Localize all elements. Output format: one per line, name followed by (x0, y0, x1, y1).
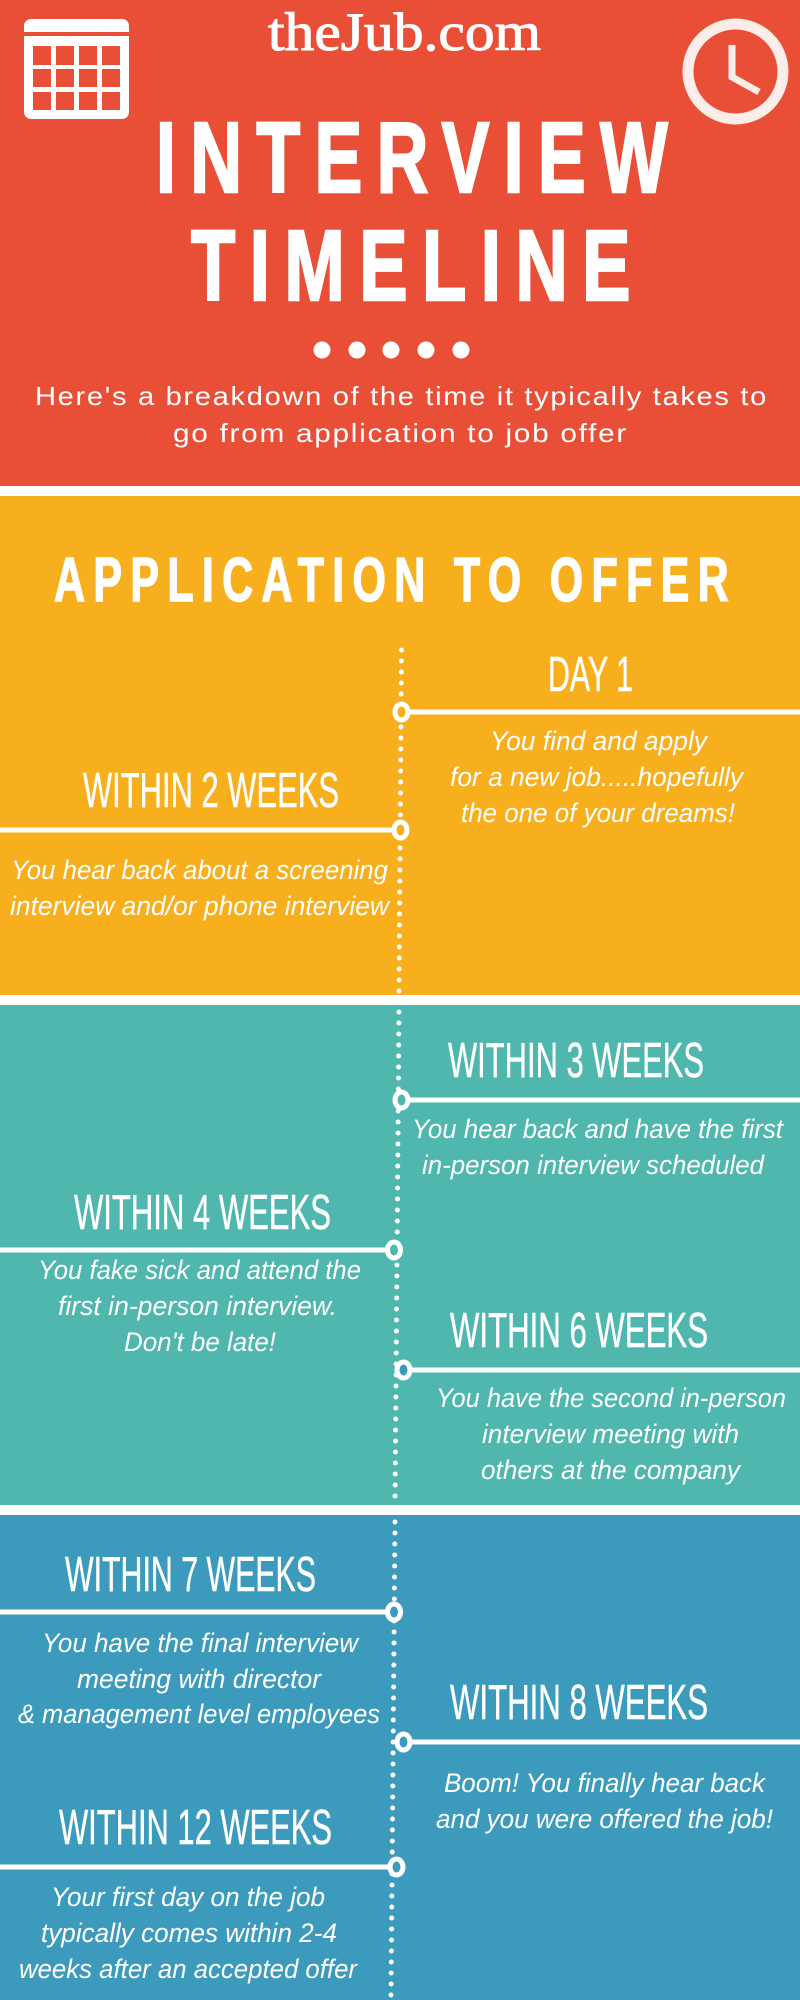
title: TIMELINE (191, 210, 645, 322)
dotted timeline spine (395, 1012, 399, 1505)
milestone: within 4 weeks: first in-person interview. (58, 1291, 337, 1321)
milestone: within 6 weeks (397, 1304, 800, 1485)
milestone: within 7 weeks: meeting with director (77, 1664, 322, 1694)
milestone: within 2 weeks: interview and/or phone interview (10, 891, 390, 921)
milestone: within 6 weeks: You have the second in-person (436, 1383, 786, 1413)
dotted timeline spine (391, 1522, 395, 2000)
milestone: within 8 weeks (397, 1676, 800, 1834)
milestone: within 4 weeks: Don't be late! (124, 1327, 276, 1357)
milestone: within 12 weeks: Your first day on the job (51, 1882, 325, 1912)
dots row (314, 342, 470, 358)
milestone: within 2 weeks: WITHIN 2 WEEKS (83, 764, 339, 818)
milestone: within 7 weeks: You have the final interview (42, 1628, 359, 1658)
milestone: within 12 weeks (0, 1801, 403, 1984)
milestone: within 3 weeks (395, 1034, 800, 1180)
milestone: within 6 weeks: interview meeting with (482, 1419, 739, 1449)
milestone: within 12 weeks: weeks after an accepted offer (19, 1954, 358, 1984)
milestone: within 6 weeks: others at the company (481, 1455, 741, 1485)
panel: teal weeks 3 to 6 (0, 1005, 800, 1505)
panel: application to offer (0, 496, 800, 995)
milestone: within 12 weeks: WITHIN 12 WEEKS (59, 1801, 332, 1855)
panel: header (0, 0, 800, 486)
icon: calendar (24, 19, 129, 119)
milestone: within 3 weeks: in-person interview scheduled (422, 1150, 765, 1180)
milestone: within 8 weeks: and you were offered the job! (436, 1804, 773, 1834)
subtitle: Here's a breakdown of the time it typically takes to (35, 381, 768, 411)
milestone: day 1: for a new job.....hopefully (450, 762, 744, 792)
milestone: within 2 weeks (0, 764, 407, 921)
milestone: day 1: You find and apply (490, 726, 708, 756)
brand name: theJub.com (268, 2, 541, 62)
title (156, 102, 682, 322)
milestone: within 7 weeks: WITHIN 7 WEEKS (65, 1548, 316, 1602)
milestone: within 8 weeks: Boom! You finally hear back (444, 1768, 766, 1798)
milestone: within 7 weeks: & management level employees (18, 1699, 380, 1729)
milestone: day 1: DAY 1 (548, 648, 633, 702)
icon: clock (688, 24, 783, 119)
milestone: within 3 weeks: You hear back and have the first (412, 1114, 784, 1144)
milestone: within 2 weeks: You hear back about a screening (11, 855, 388, 885)
panel: blue weeks 7 to 12 (0, 1515, 800, 2000)
subtitle (35, 381, 768, 448)
subtitle: go from application to job offer (173, 418, 628, 448)
milestone: within 4 weeks: You fake sick and attend the (38, 1255, 361, 1285)
dotted timeline spine (399, 650, 402, 993)
milestone: within 4 weeks: WITHIN 4 WEEKS (74, 1186, 331, 1240)
milestone: day 1: the one of your dreams! (461, 798, 735, 828)
milestone: within 12 weeks: typically comes within 2-4 (41, 1918, 337, 1948)
milestone: day 1 (395, 648, 800, 828)
milestone: within 4 weeks (0, 1186, 400, 1357)
milestone: within 7 weeks (0, 1548, 400, 1729)
